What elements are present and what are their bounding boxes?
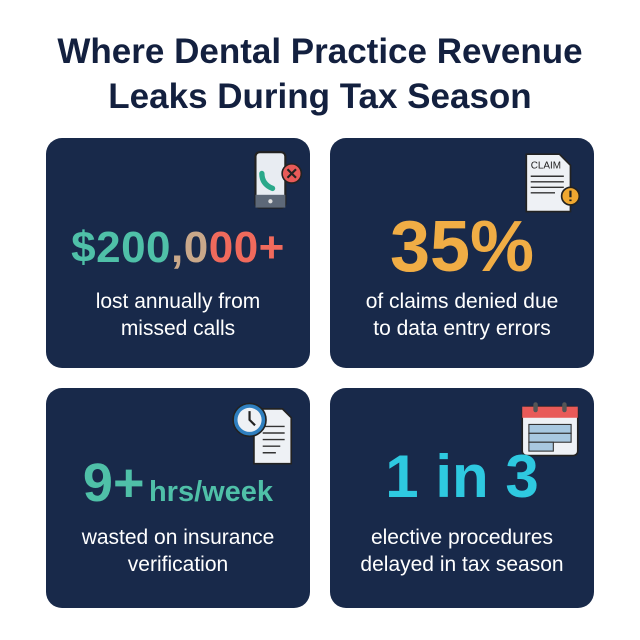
panel: missed calls bbox=[46, 138, 310, 368]
icon: phone bbox=[254, 151, 302, 209]
icon: claim document bbox=[526, 153, 580, 212]
text: claims denied bbox=[366, 290, 558, 340]
stat: 9+ hrs/week: 9+ hrs/week bbox=[83, 453, 273, 513]
text: elective procedures: elective procedures bbox=[371, 526, 553, 549]
title: Leaks During Tax Season bbox=[108, 77, 532, 116]
panel: insurance verification bbox=[46, 388, 310, 608]
stat: 35%: 35% bbox=[390, 207, 534, 287]
text: elective procedures bbox=[360, 526, 564, 576]
text: wasted on verification bbox=[82, 526, 274, 576]
text: lost annually bbox=[96, 290, 260, 340]
text: claims denied: to data entry errors bbox=[373, 317, 551, 340]
text: claims denied: of claims denied due bbox=[366, 290, 558, 313]
stat: $200,000+: $200,000+ bbox=[71, 223, 285, 272]
panel: elective procedures bbox=[330, 388, 594, 608]
text: elective procedures: delayed in tax season bbox=[360, 553, 564, 576]
icon: calendar bbox=[521, 402, 579, 456]
icon: claim document: CLAIM bbox=[531, 161, 561, 172]
text: wasted on verification: verification bbox=[128, 553, 228, 576]
panel: claims denied bbox=[330, 138, 594, 368]
text: wasted on verification: wasted on insurance bbox=[82, 526, 274, 549]
title bbox=[57, 32, 583, 116]
stat: 1 in 3: 1 in 3 bbox=[385, 443, 539, 510]
icon: clock document bbox=[232, 402, 292, 464]
text: lost annually: missed calls bbox=[121, 317, 235, 340]
title: Where Dental Practice Revenue bbox=[57, 32, 583, 71]
text: lost annually: lost annually from bbox=[96, 290, 260, 313]
